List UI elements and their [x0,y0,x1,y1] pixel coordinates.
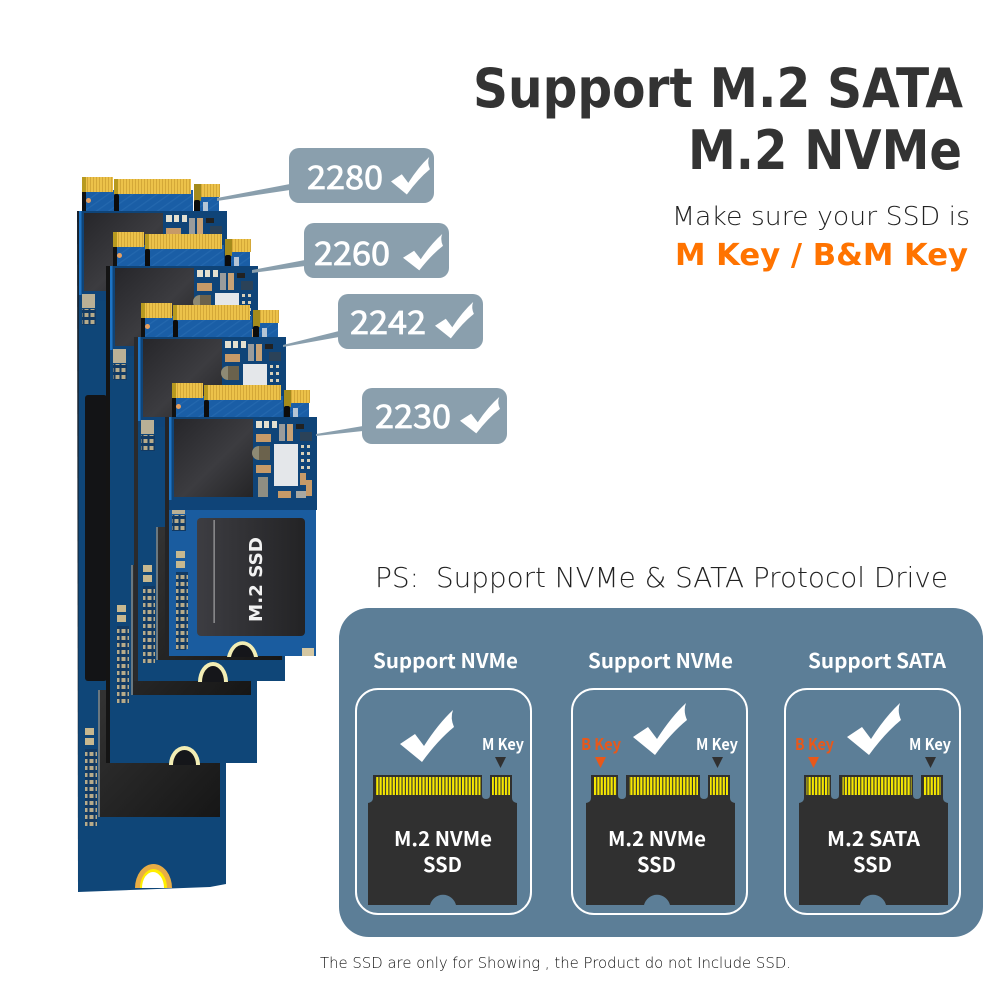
SSD shape [586,775,735,905]
SSD shape: SSD [853,849,892,878]
SSD chip label [197,518,305,636]
column: Support SATA [785,645,960,914]
heading: Support NVMe [373,645,518,674]
mounting notch 2260 [169,746,200,765]
SSD shape: M.2 SATA [827,823,920,852]
title: M.2 NVMe [688,119,962,182]
protocol note: PS: [375,561,419,594]
M Key arrow [712,757,723,768]
key instruction text: M Key / B&M Key [675,238,968,273]
heading: Support NVMe [588,645,733,674]
M Key label: M Key [909,731,951,755]
size badge 2242 [283,294,483,349]
check mark [847,703,901,755]
B Key arrow [595,757,606,768]
M Key arrow [925,757,936,768]
size badge 2280: 2280 [307,153,383,199]
key instruction text [672,202,970,273]
board 2280 [77,177,227,892]
size badge 2260: 2260 [314,229,390,275]
SSD chip label: M.2 SSD [246,537,267,622]
column: Support NVMe M key [356,645,531,914]
board 2230 [165,383,317,657]
heading: Support SATA [808,645,946,674]
mounting notch 2280 [135,864,172,888]
SSD shape [368,775,517,905]
mounting notch 2230 [227,641,258,657]
card outline [356,689,531,914]
title [473,57,963,182]
board 2260 [106,232,258,765]
mounting notch 2242 [198,662,228,682]
M Key label: M Key [482,731,524,755]
size badge 2230: 2230 [375,392,451,438]
size badge 2230 [316,388,507,444]
SSD shape: M.2 NVMe [394,823,492,852]
check mark [400,710,454,762]
check mark [633,703,687,755]
B Key label: B Key [795,731,834,755]
size badge 2280 [217,148,434,203]
footnote: The SSD are only for Showing , the Product do not Include SSD. [320,954,791,972]
key instruction text: Make sure your SSD is [672,202,970,232]
board 2242 [134,303,286,682]
M Key arrow [495,757,506,768]
panel: key types [339,608,983,937]
B Key arrow [808,757,819,768]
size badge 2260 [252,223,449,278]
SSD shape: M.2 NVMe [608,823,706,852]
column: Support NVMe B and M key [572,645,747,914]
SSD shape [799,775,948,905]
M Key label: M Key [696,731,738,755]
SSD shape: SSD [423,849,462,878]
card outline [785,689,960,914]
B Key label: B Key [581,731,621,755]
protocol note: Support NVMe & SATA Protocol Drive [436,561,948,594]
card outline [572,689,747,914]
SSD stack illustration [77,177,317,892]
size badge 2242: 2242 [350,298,426,344]
SSD shape: SSD [637,849,676,878]
